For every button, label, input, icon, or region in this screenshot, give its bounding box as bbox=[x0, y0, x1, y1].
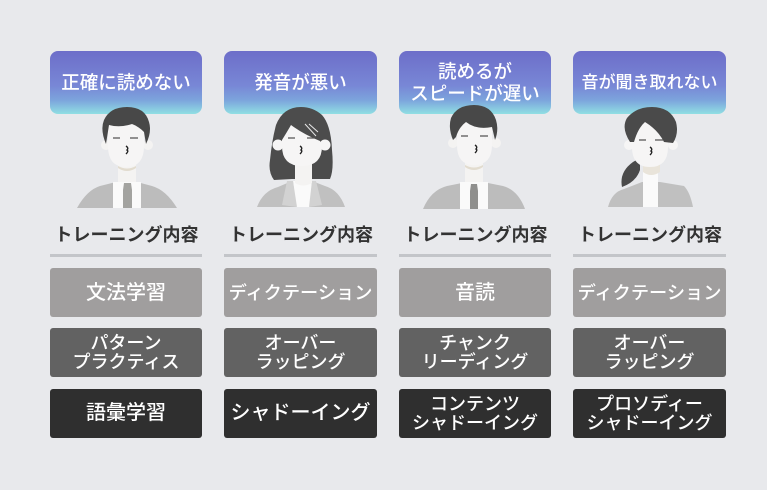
training: ディクテーション: ディクテーション bbox=[229, 283, 372, 303]
training: オーバーラッピング: オーバー bbox=[265, 332, 336, 352]
training: コンテンツシャドーイング: シャドーイング bbox=[412, 413, 538, 433]
training: コンテンツシャドーイング: コンテンツ bbox=[430, 394, 520, 414]
training: パターンプラクティス: パターン bbox=[90, 332, 162, 352]
training: ディクテーション bbox=[224, 268, 377, 317]
training: チャンクリーディング: チャンク bbox=[439, 332, 511, 352]
training: オーバーラッピング: ラッピング bbox=[604, 352, 694, 372]
training: コンテンツシャドーイング bbox=[399, 389, 551, 438]
training: ディクテーション: ディクテーション bbox=[578, 283, 721, 303]
training: ディクテーション bbox=[573, 268, 726, 317]
training: シャドーイング bbox=[224, 389, 377, 438]
training: オーバーラッピング: ラッピング bbox=[256, 352, 346, 372]
training: チャンクリーディング: リーディング bbox=[422, 352, 528, 372]
training: オーバーラッピング: オーバー bbox=[614, 332, 685, 352]
training: 語彙学習 bbox=[50, 389, 202, 438]
problem bubble: 正確に読めない bbox=[50, 51, 202, 114]
problem bubble: 読めるがスピードが遅い: スピードが遅い bbox=[410, 83, 540, 104]
training: プロソディーシャドーイング: シャドーイング bbox=[586, 413, 712, 433]
training: プロソディーシャドーイング: プロソディー bbox=[596, 394, 703, 414]
problem bubble: 正確に読めない: 正確に読めない bbox=[61, 72, 191, 93]
problem bubble: 読めるがスピードが遅い: 読めるが bbox=[438, 61, 512, 82]
training: 文法学習: 文法学習 bbox=[86, 282, 166, 304]
training: オーバーラッピング bbox=[224, 328, 377, 377]
problem bubble: 音が聞き取れない bbox=[573, 51, 726, 114]
problem bubble: 発音が悪い bbox=[224, 51, 377, 114]
heading: column 2: トレーニング内容 bbox=[229, 225, 373, 245]
problem bubble: 発音が悪い: 発音が悪い bbox=[254, 72, 347, 93]
training: パターンプラクティス: プラクティス bbox=[73, 352, 179, 372]
icon: woman 2 bbox=[608, 107, 693, 207]
icon: woman 1 bbox=[257, 107, 345, 207]
heading: column 4: トレーニング内容 bbox=[578, 225, 722, 245]
problem bubble: 音が聞き取れない: 音が聞き取れない bbox=[582, 73, 718, 92]
icon: man 2 bbox=[423, 105, 525, 209]
training: 音読: 音読 bbox=[455, 282, 495, 304]
heading: column 3: トレーニング内容 bbox=[404, 225, 548, 245]
training: パターンプラクティス bbox=[50, 328, 202, 377]
training: 語彙学習: 語彙学習 bbox=[86, 402, 166, 424]
training: 音読 bbox=[399, 268, 551, 317]
training: プロソディーシャドーイング bbox=[573, 389, 726, 438]
training: シャドーイング: シャドーイング bbox=[230, 402, 370, 424]
heading: column 1: トレーニング内容 bbox=[54, 225, 198, 245]
training: 文法学習 bbox=[50, 268, 202, 317]
training: オーバーラッピング bbox=[573, 328, 726, 377]
icon: man 1 bbox=[77, 107, 177, 208]
training: チャンクリーディング bbox=[399, 328, 551, 377]
problem bubble: 読めるがスピードが遅い bbox=[399, 51, 551, 114]
